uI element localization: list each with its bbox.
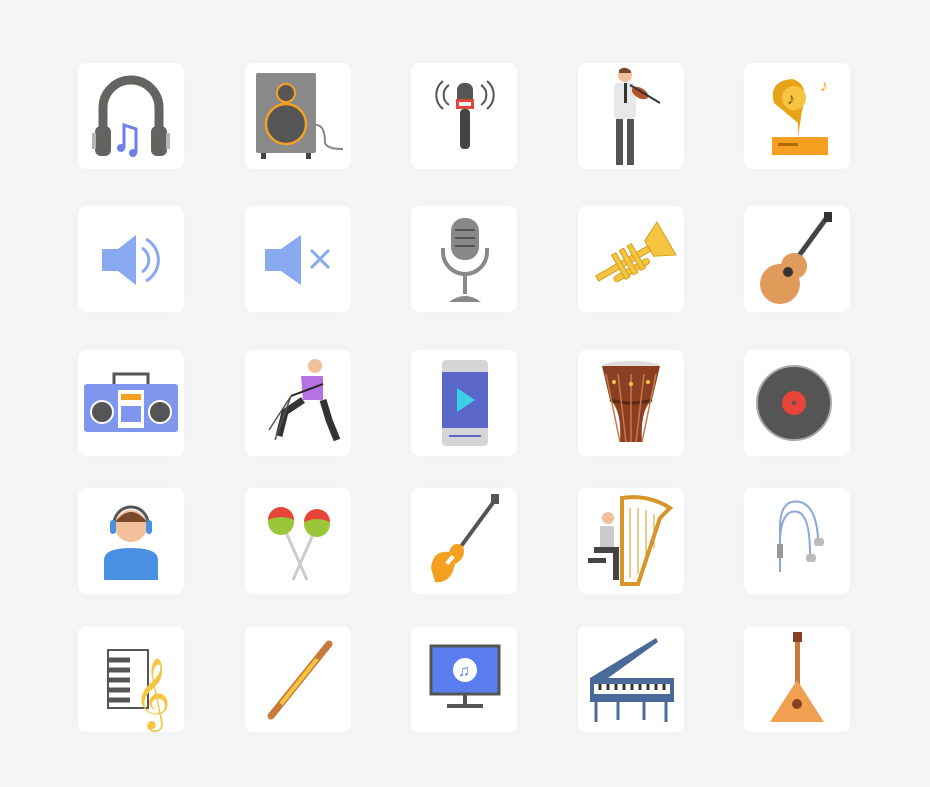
- card: balalaika: [744, 626, 850, 732]
- card: harpist: [578, 488, 684, 594]
- card: volume: [78, 206, 184, 312]
- card: singer: [245, 350, 351, 456]
- card: electric guitar: [411, 488, 517, 594]
- card: maracas: [245, 488, 351, 594]
- card: headphones: [78, 63, 184, 169]
- card: acoustic guitar: [744, 206, 850, 312]
- card: flute: [245, 626, 351, 732]
- card: microphone broadcast: [411, 63, 517, 169]
- card: mute: [245, 206, 351, 312]
- card: vinyl: [744, 350, 850, 456]
- card: phone player: [411, 350, 517, 456]
- card: sheet music: [78, 626, 184, 732]
- card: gramophone: ♪: [787, 91, 795, 108]
- card: violinist: [578, 63, 684, 169]
- card: boombox: [78, 350, 184, 456]
- card: speaker: [245, 63, 351, 169]
- card: trumpet: [578, 206, 684, 312]
- card: gramophone: [744, 63, 850, 169]
- card: monitor music: [411, 626, 517, 732]
- card: studio mic: [411, 206, 517, 312]
- card: earphones: [744, 488, 850, 594]
- card: sheet music: 𝄞: [134, 656, 171, 732]
- card: monitor music: ♫: [458, 663, 470, 680]
- card: djembe: [578, 350, 684, 456]
- card: gramophone: ♪: [820, 78, 828, 95]
- card: piano: [578, 626, 684, 732]
- card: listener: [78, 488, 184, 594]
